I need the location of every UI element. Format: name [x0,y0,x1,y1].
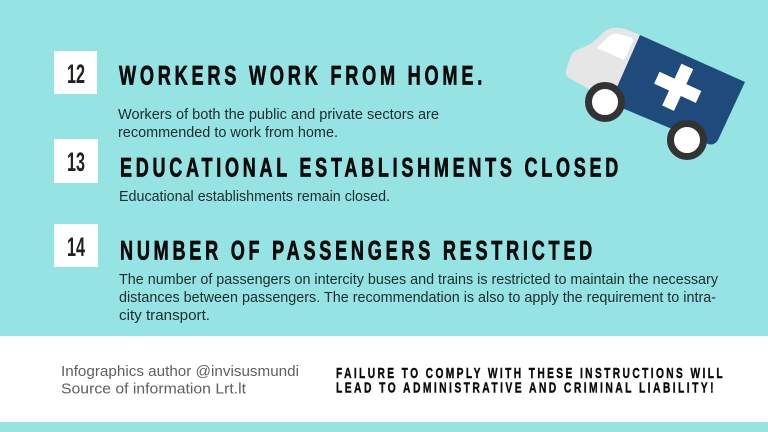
icon: ambulance [566,28,745,156]
badge: number 12 [54,51,97,94]
text: educational description: Educational establishments remain closed. [119,188,390,205]
text: credits: Infographics author @invisusmundi [61,363,299,380]
badge: number 13 [54,139,98,183]
text: passengers description: distances between passengers. The recommendation is also to apply the requirement to intra- [119,289,716,306]
text: credits: Source of information Lrt.lt [61,380,247,398]
badge: number 12: 12 [67,59,85,89]
panel: footer band [0,336,768,422]
heading: workers work from home: WORKERS WORK FROM HOME. [119,60,486,90]
text: workers description [118,106,439,141]
text: passengers description: The number of passengers on intercity buses and trains is restricted to maintain the necessary [119,271,718,288]
text: credits [61,363,299,398]
text: workers description: recommended to work from home. [118,124,338,141]
text: workers description: Workers of both the public and private sectors are [118,106,439,123]
badge: number 14 [54,224,98,267]
text: passengers description [119,271,718,324]
text: warning [336,365,725,396]
text: passengers description: city transport. [119,307,210,324]
badge: number 14: 14 [67,232,85,262]
badge: number 13: 13 [67,147,85,177]
